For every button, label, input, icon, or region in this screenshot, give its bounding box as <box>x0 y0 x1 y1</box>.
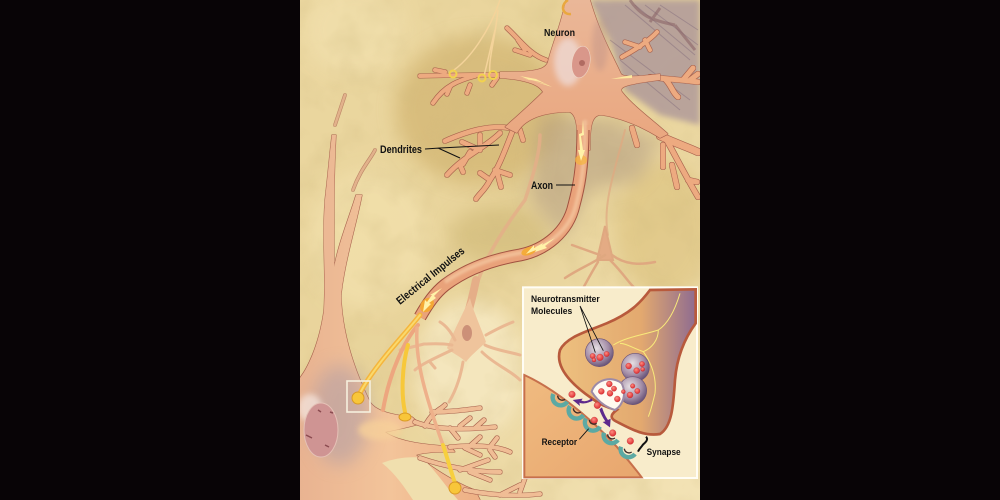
inset: synapse detail <box>523 287 697 478</box>
axon <box>420 120 585 317</box>
label: Synapse with bracket: Synapse <box>647 447 681 457</box>
bottom-left neuron dendrites <box>335 95 540 495</box>
top neuron <box>500 0 668 150</box>
presynaptic terminal <box>559 289 696 435</box>
faded background neuron, right <box>565 130 655 290</box>
neurotransmitter molecules <box>569 351 645 444</box>
label: Dendrites with leader lines: Dendrites <box>380 144 422 156</box>
top neuron dendrites <box>420 28 698 199</box>
label: Neurotransmitter Molecules with leaders: Molecules <box>531 306 572 316</box>
receptor inner dark lines <box>558 396 632 453</box>
label: Neurotransmitter Molecules with leaders: Neurotransmitter <box>531 294 600 304</box>
label: Synapse with bracket <box>638 437 681 457</box>
inset frame <box>523 287 697 478</box>
vesicles <box>585 339 649 405</box>
purple release arrows <box>573 398 611 427</box>
faded purple tissue, upper right <box>530 0 700 240</box>
illustration background panel <box>300 0 715 500</box>
electrical impulses on axon <box>417 75 632 315</box>
receptors <box>553 394 635 457</box>
label: Receptor with leader <box>542 429 589 447</box>
vesicle opening <box>592 379 624 410</box>
small pale neuron, centre <box>400 298 520 402</box>
axon branches to next neuron <box>360 315 455 483</box>
label: Receptor with leader: Receptor <box>542 437 577 447</box>
incoming axon terminals, top <box>450 0 571 82</box>
axon terminal buttons <box>352 392 461 494</box>
soma shading and nucleus <box>298 365 402 465</box>
label: Dendrites with leader lines <box>380 144 499 158</box>
label: Axon with leader line <box>531 180 575 192</box>
faded neurite through centre <box>466 135 540 320</box>
label: Neuron: Neuron <box>544 27 575 39</box>
postsynaptic membrane <box>524 375 642 477</box>
yellow lightning <box>613 293 680 417</box>
highlight box on synapse <box>347 381 370 412</box>
bottom-left neuron <box>300 135 480 500</box>
label: Axon with leader line: Axon <box>531 180 553 192</box>
label: Neurotransmitter Molecules with leaders <box>531 294 603 353</box>
top neuron highlights and nucleus <box>554 19 608 86</box>
label: Electrical Impulses: Electrical Impulses <box>394 245 467 307</box>
